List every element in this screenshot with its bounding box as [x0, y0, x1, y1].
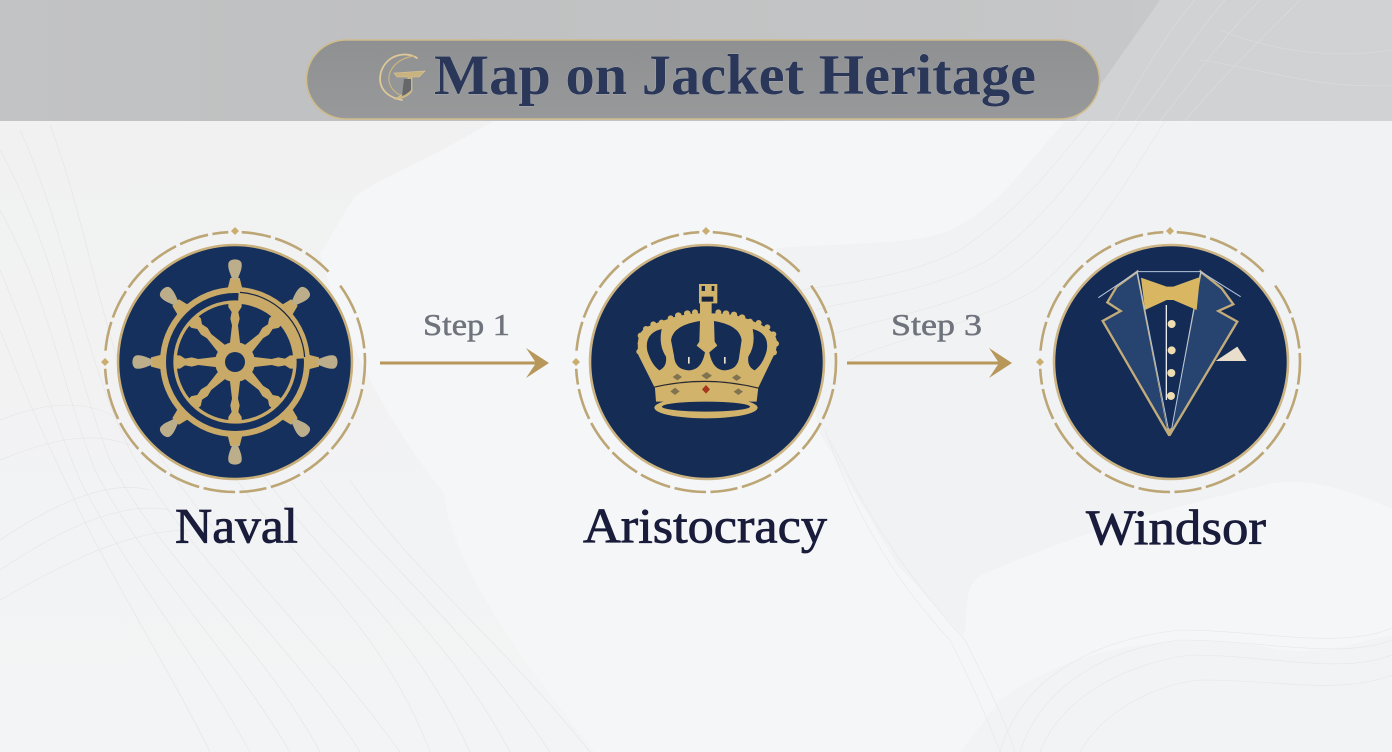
banner pill — [306, 40, 1100, 119]
shirt line — [1164, 305, 1168, 400]
arrow shape — [380, 348, 549, 378]
arrow: Step 3 — [847, 307, 1012, 378]
ring diamonds — [1036, 227, 1174, 366]
label: Naval: Naval — [175, 498, 298, 554]
title banner — [306, 40, 1100, 119]
arrow shape — [847, 348, 1012, 378]
title text: Map on Jacket Heritage — [434, 44, 1036, 107]
icon: G monogram — [380, 54, 425, 100]
header band — [0, 0, 1392, 121]
icon: crown — [636, 284, 779, 418]
step label: Step 3 — [891, 307, 982, 342]
icon: ship wheel — [132, 259, 338, 465]
arrow: Step 1 — [380, 307, 549, 378]
crown band — [653, 381, 759, 388]
step: Aristocracy — [572, 227, 836, 554]
icon: tuxedo — [1098, 272, 1247, 436]
collar lines — [1098, 272, 1241, 429]
ring diamonds — [101, 227, 239, 366]
lapels — [1103, 272, 1169, 436]
dashed ring — [1040, 232, 1300, 492]
crown jewels — [702, 385, 710, 394]
ring diamonds — [572, 227, 710, 366]
navy disc — [1054, 245, 1288, 479]
dashed ring — [105, 232, 365, 492]
label: Aristocracy: Aristocracy — [583, 498, 827, 554]
bow tie — [1141, 277, 1200, 310]
step label: Step 1 — [423, 307, 510, 342]
pocket square — [1216, 347, 1247, 361]
navy disc — [590, 245, 824, 479]
step: Windsor — [1036, 227, 1300, 555]
dashed ring — [576, 232, 836, 492]
label: Windsor: Windsor — [1086, 499, 1266, 555]
shirt buttons — [1167, 320, 1176, 400]
navy disc — [118, 245, 352, 479]
step: Naval — [101, 227, 365, 554]
